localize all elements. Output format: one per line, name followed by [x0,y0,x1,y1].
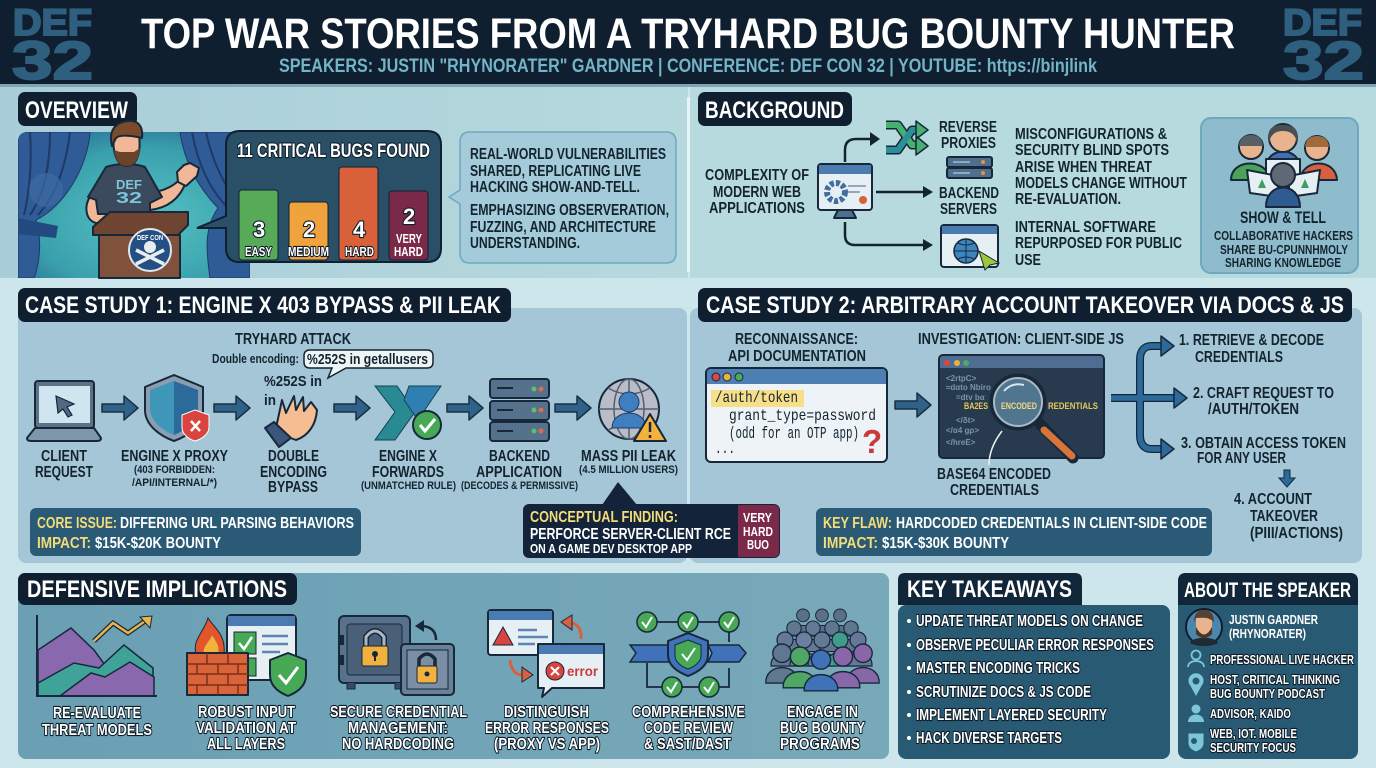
window: client-side JS code with magnifier: <2rtpC> [946,374,977,383]
heading: defensive implications: DEFENSIVE IMPLICATIONS [27,576,287,603]
text: misconfigurations [1015,126,1187,208]
bar: easy [239,190,278,260]
list: takeaways: MASTER ENCODING TRICKS [916,660,1080,677]
item: engage in bug bounty programs: PROGRAMS [780,736,860,753]
window: api documentation: grant_type=password [729,407,876,425]
bio: podcast host [1188,673,1340,701]
step list: exploit chain: TAKEOVER [1250,508,1318,525]
list: takeaways: UPDATE THREAT MODELS ON CHANGE [916,613,1143,630]
window: client-side JS code with magnifier: ENCODED [1001,401,1037,411]
bar: very hard [389,191,428,260]
bar: very hard: HARD [394,244,423,259]
item: distinguish error responses: (PROXY VS APP) [494,736,600,753]
window: client-side JS code with magnifier: BA2ES [964,401,988,411]
avatar: speaker [1186,609,1222,646]
callout: key flaw and impact: IMPACT: [823,535,878,552]
arrows: branching exploit chain [1111,336,1187,459]
card: show and tell [1201,118,1358,273]
step: backend application: (DECODES & PERMISSIVE) [461,480,578,492]
arrow [895,393,931,417]
callout: core issue and impact: $15K-$20K BOUNTY [95,535,221,552]
heading: background [698,92,852,126]
label: base64 credentials: BASE64 ENCODED [937,466,1051,483]
step: double encoding bypass: DOUBLE [268,448,319,465]
window: api documentation: ? [862,423,882,460]
text block: overview summary [449,132,676,263]
arrow [102,396,138,420]
window: client-side JS code with magnifier [939,355,1104,458]
step list: exploit chain: /AUTH/TOKEN [1208,401,1299,418]
bio: security focus: WEB, IOT. MOBILE [1210,727,1297,741]
item: secure credential management: NO HARDCODING [342,736,454,753]
window: client-side JS code with magnifier: ≈dαto Nbiro [946,383,991,392]
step: client request [27,381,101,481]
callout: core issue and impact: CORE ISSUE: [37,515,117,532]
heading: background: BACKGROUND [705,97,844,124]
arrows: to proxies, servers, browser [845,132,933,251]
heading: reconnaissance [728,331,866,365]
text: internal software: INTERNAL SOFTWARE [1015,219,1156,236]
step: engine x proxy: (403 FORBIDDEN: [134,464,215,476]
step: mass PII leak: (4.5 MILLION USERS) [579,464,678,476]
item: robust input validation: ALL LAYERS [207,736,285,753]
text: speaker name: JUSTIN GARDNER [1229,612,1318,627]
text: misconfigurations: MISCONFIGURATIONS & [1015,126,1167,143]
bar: hard [339,167,378,260]
item: secure credential management: SECURE CREDENTIAL [330,704,467,721]
window: client-side JS code with magnifier: </δt> [956,416,975,425]
callout: conceptual finding: CONCEPTUAL FINDING: [530,509,678,526]
list: takeaways: IMPLEMENT LAYERED SECURITY [916,707,1107,724]
window: api documentation: ... [715,440,735,458]
text block: overview summary: SHARED, REPLICATING LIVE [470,163,641,180]
icon: web app monitor [818,164,872,218]
callout: double encoding [212,350,433,378]
bar: medium: 2 [303,217,315,242]
step: backend application [461,379,578,492]
item: engage in bug bounty programs: BUG BOUNTY [780,720,865,737]
heading: reconnaissance: API DOCUMENTATION [728,348,866,365]
callout: conceptual finding: BUO [747,537,769,552]
item: comprehensive code review: & SAST/DAST [644,736,731,753]
text block: overview summary: FUZZING, AND ARCHITECTURE [470,219,656,236]
heading: case study 1 [18,288,511,322]
arrow [447,396,483,420]
panel: about the speaker [1178,573,1358,759]
list: takeaways: SCRUTINIZE DOCS & JS CODE [916,684,1091,701]
step: engine x proxy [121,375,228,489]
bar: easy: 3 [253,217,265,242]
heading: overview [18,92,137,126]
card: show and tell: SHARING KNOWLEDGE [1225,256,1341,270]
window: api documentation [706,368,887,462]
step: mass PII leak [579,379,678,476]
step list: exploit chain: FOR ANY USER [1197,450,1286,467]
text: complexity: MODERN WEB [713,184,801,201]
step: double encoding bypass: BYPASS [268,479,318,496]
item: robust input validation [187,615,306,753]
bio: security focus: SECURITY FOCUS [1210,741,1296,755]
icon: backend server [947,157,992,178]
heading: reconnaissance: RECONNAISSANCE: [735,331,858,348]
heading: tryhard attack: TRYHARD ATTACK [235,331,352,348]
text block: overview summary: UNDERSTANDING. [470,235,580,252]
callout: double encoding: Double encoding: [212,351,299,366]
icon: collaborative hackers [1231,124,1337,207]
item: secure credential management [330,616,467,753]
callout: key flaw and impact: KEY FLAW: [823,515,892,532]
step list: exploit chain [1179,332,1346,542]
item: comprehensive code review: CODE REVIEW [644,720,734,737]
window: client-side JS code with magnifier: REDENTIALS [1048,401,1098,411]
step: client request: REQUEST [35,464,93,481]
label: backend servers: SERVERS [940,201,997,218]
callout: conceptual finding: HARD [743,524,773,539]
bio: advisor [1188,704,1291,722]
panel: case study 2 [690,288,1362,563]
text: misconfigurations: MODELS CHANGE WITHOUT [1015,175,1187,192]
callout: conceptual finding: PERFORCE SERVER-CLIENT RCE [530,526,731,543]
item: comprehensive code review [630,612,746,753]
speaker figure [86,121,199,223]
step list: exploit chain: 2. CRAFT REQUEST TO [1193,385,1334,402]
logo: DEF 32 left [12,2,93,91]
logo: DEF 32 right: 32 [1283,31,1364,91]
bar: medium [288,202,329,260]
step: engine x forwards: (UNMATCHED RULE) [361,480,456,492]
callout: key flaw and impact [816,508,1212,556]
list: takeaways [907,613,1154,747]
callout: conceptual finding: VERY [743,510,772,525]
illustration: stage with curtains [18,132,250,278]
item: engage in bug bounty programs [766,609,879,753]
podium with seal [93,212,188,278]
bar: medium: MEDIUM [288,244,329,259]
label: base64 credentials: CREDENTIALS [950,482,1039,499]
text: misconfigurations: ARISE WHEN THREAT [1015,159,1152,176]
item: re-evaluate threat models [37,615,157,739]
list: takeaways: HACK DIVERSE TARGETS [916,730,1062,747]
callout: core issue and impact: IMPACT: [37,535,91,552]
bar: very hard: 2 [403,204,415,229]
step: double encoding bypass: ENCODING [260,464,327,481]
callout: core issue and impact: DIFFERING URL PARSING BEHAVIORS [120,515,354,532]
text: complexity [705,167,809,217]
logo: DEF 32 right: DEF [1283,2,1362,43]
subtitle: SPEAKERS: JUSTIN "RHYNORATER" GARDNER | CONFERENCE: DEF CON 32 | YOUTUBE: https://binjlink [279,56,1097,77]
step: backend application: BACKEND [489,448,550,465]
heading: overview: OVERVIEW [25,97,128,124]
text: misconfigurations: SECURITY BLIND SPOTS [1015,142,1169,159]
logo: DEF 32 right [1283,2,1364,91]
bar: easy: EASY [245,244,272,259]
item: distinguish error responses [485,610,609,753]
panel: overview [0,87,688,278]
step list: exploit chain: CREDENTIALS [1195,349,1283,366]
chart: bug counts bubble: 11 CRITICAL BUGS FOUND [237,141,430,162]
text: speaker name [1229,612,1318,641]
item: engage in bug bounty programs: ENGAGE IN [787,704,858,721]
heading: about the speaker [1178,573,1358,605]
step: engine x proxy: ENGINE X PROXY [121,448,228,465]
bar: very hard: VERY [396,231,422,246]
text: complexity: COMPLEXITY OF [705,167,809,184]
label: reverse proxies: PROXIES [941,135,996,152]
window: client-side JS code with magnifier: </α4 gρ> [946,426,979,435]
bar: hard: HARD [345,244,374,259]
label: base64 credentials [937,431,1051,499]
step: engine x forwards: ENGINE X [379,448,437,465]
item: re-evaluate threat models: THREAT MODELS [42,722,152,739]
arrow [555,396,591,420]
heading: investigation: INVESTIGATION: CLIENT-SIDE JS [918,331,1124,348]
label: reverse proxies: REVERSE [939,119,997,136]
step: double encoding bypass: %252S in [264,373,322,390]
text: speaker name: (RHYNORATER) [1229,626,1306,641]
list: takeaways: OBSERVE PECULIAR ERROR RESPONSES [916,637,1154,654]
chart: bug counts bubble [197,131,441,262]
step: double encoding bypass: in [264,392,276,409]
card: show and tell: SHOW & TELL [1240,208,1326,227]
callout: key flaw and impact: $15K-$30K BOUNTY [882,535,1009,552]
window: client-side JS code with magnifier: =dtv bα [956,393,985,402]
item: distinguish error responses: ERROR RESPONSES [485,720,609,737]
step list: exploit chain: 4. ACCOUNT [1234,491,1312,508]
step: client request: CLIENT [41,448,87,465]
callout: core issue and impact [30,508,361,556]
step: engine x forwards [361,386,456,492]
bio: security focus [1188,727,1297,755]
logo: DEF 32 left: 32 [12,31,93,91]
item: robust input validation: ROBUST INPUT [198,704,295,721]
panel: key takeaways [898,573,1170,759]
item: robust input validation: VALIDATION AT [196,720,296,737]
text: complexity: APPLICATIONS [709,200,805,217]
text block: overview summary: HACKING SHOW-AND-TELL. [470,179,640,196]
card: show and tell: SHARE BU-CPUNNHMOLY [1220,243,1349,257]
label: backend servers [939,185,999,218]
bio: podcast host: HOST, CRITICAL THINKING [1210,673,1340,687]
header banner [0,0,1376,91]
arrow [334,396,370,420]
label: backend servers: BACKEND [939,185,999,202]
icon: public browser [941,225,999,270]
text block: overview summary: EMPHASIZING OBSERVERATION, [470,202,669,219]
step: double encoding bypass [260,373,327,496]
callout: key flaw and impact: HARDCODED CREDENTIALS IN CLIENT-SIDE CODE [896,515,1207,532]
panel: defensive implications [18,573,889,759]
arrow [214,396,250,420]
step list: exploit chain: 1. RETRIEVE & DECODE [1179,332,1324,349]
label: reverse proxies [939,119,997,152]
step: mass PII leak: MASS PII LEAK [581,448,676,465]
step: engine x proxy: /API/INTERNAL/*) [132,477,217,489]
text: internal software: USE [1015,252,1041,269]
item: re-evaluate threat models: RE-EVALUATE [53,705,141,722]
panel: case study 1 [18,288,687,563]
callout: conceptual finding [523,482,780,558]
window: api documentation: (odd for an OTP app) [729,425,859,444]
podium with seal: DEF CON [137,235,163,242]
window: client-side JS code with magnifier: </hreE> [946,438,976,447]
bio: podcast host: BUG BOUNTY PODCAST [1210,687,1325,701]
panel: background [687,87,1376,278]
text: misconfigurations: RE-EVALUATION. [1015,191,1121,208]
heading: key takeaways: KEY TAKEAWAYS [907,576,1072,603]
bio: professional hacker [1188,650,1354,667]
item: comprehensive code review: COMPREHENSIVE [632,704,745,721]
step list: exploit chain: (PIII/ACTIONS) [1250,525,1343,542]
icon: reverse proxy [886,121,928,155]
heading: case study 1: CASE STUDY 1: ENGINE X 403 BYPASS & PII LEAK [25,292,502,319]
text: internal software [1015,219,1182,269]
speaker figure: 32 [116,190,142,207]
text block: overview summary: REAL-WORLD VULNERABILITIES [470,146,666,163]
bar: hard: 4 [353,217,366,242]
bio: advisor: ADVISOR, KAIDO [1210,707,1291,721]
step: backend application: APPLICATION [476,464,562,481]
item: distinguish error responses: DISTINGUISH [504,704,589,721]
item: secure credential management: MANAGEMENT: [348,720,448,737]
callout: conceptual finding: ON A GAME DEV DESKTOP APP [530,541,692,556]
text: internal software: REPURPOSED FOR PUBLIC [1015,235,1182,252]
window: api documentation: /auth/token [715,389,798,407]
speaker figure: DEF [116,177,142,192]
logo: DEF 32 left: DEF [13,2,92,43]
step: engine x forwards: FORWARDS [372,464,444,481]
item: distinguish error responses: error [567,663,599,679]
callout: double encoding: %252S in getallusers [307,352,428,368]
